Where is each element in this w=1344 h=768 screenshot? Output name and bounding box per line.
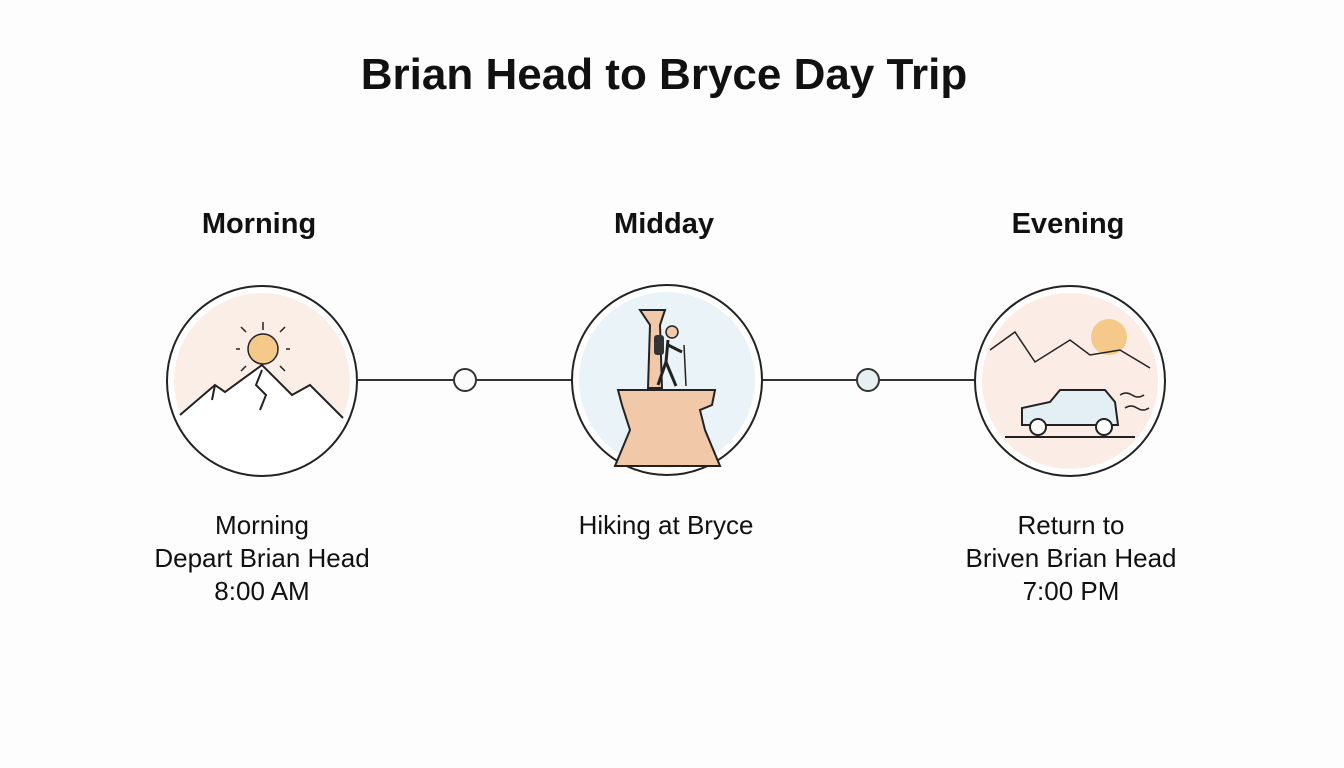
- timeline graphic: [166, 284, 1166, 477]
- text: morning: Morning: [215, 510, 309, 540]
- connector lines: [358, 379, 974, 381]
- heading: evening: Evening: [1012, 208, 1124, 240]
- text: morning: [154, 510, 370, 606]
- heading: morning: Morning: [202, 208, 316, 240]
- heading: midday: Midday: [614, 208, 714, 240]
- text: midday: Hiking at Bryce: [579, 510, 753, 540]
- timeline dot 1: [454, 369, 476, 391]
- text: morning: Depart Brian Head: [154, 543, 370, 573]
- icon: hiker on hoodoo: [572, 285, 762, 475]
- icon: car return: [975, 286, 1165, 476]
- text: evening: Briven Brian Head: [966, 543, 1176, 573]
- text: evening: 7:00 PM: [1023, 576, 1119, 606]
- title: Brian Head to Bryce Day Trip: [361, 50, 967, 99]
- timeline dot 2: [857, 369, 879, 391]
- text: morning: 8:00 AM: [214, 576, 310, 606]
- text: evening: Return to: [1018, 510, 1124, 540]
- text: evening: [966, 510, 1176, 606]
- icon: morning sunrise mountain: [160, 286, 360, 480]
